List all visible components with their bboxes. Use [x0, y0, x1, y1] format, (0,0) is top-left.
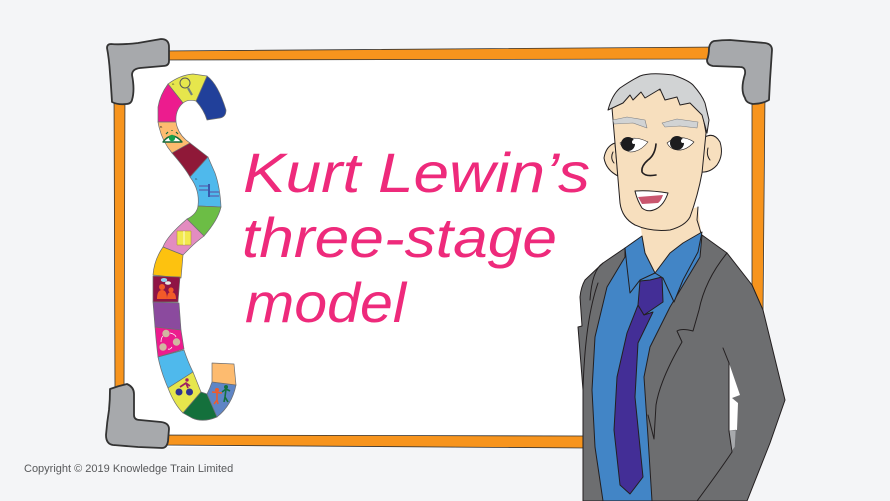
segment: light orange: [212, 363, 236, 385]
right eyebrow: [662, 119, 698, 128]
copyright note: Copyright © 2019 Knowledge Train Limited: [24, 463, 233, 475]
title line 2: three-stage: [242, 206, 557, 269]
segment: gold: [153, 247, 183, 278]
segment: green: [187, 206, 221, 236]
segment: yellow with cyclist: [168, 372, 201, 413]
corner bracket: top right: [707, 40, 772, 104]
corner bracket: bottom left: [106, 384, 169, 448]
sleeve cuff: [729, 430, 736, 452]
segment: slate blue with dancers: [207, 382, 236, 417]
jacket: [578, 235, 785, 501]
left ear: [604, 143, 618, 176]
neck: [640, 207, 701, 273]
mouth: [635, 191, 668, 211]
segment: orange B with eye: [158, 122, 190, 153]
jacket details: [583, 253, 732, 501]
left collar: [625, 236, 655, 293]
segment: dark maroon with people: [153, 276, 180, 302]
winding change path board game: [153, 74, 236, 420]
nose: [642, 144, 656, 176]
title line 3: model: [245, 271, 408, 334]
segment: navy: [196, 76, 226, 120]
right collar: [655, 232, 702, 302]
tie body: [614, 305, 653, 494]
tie knot: [638, 277, 663, 315]
segment: light blue C with sliders: C.: [195, 177, 198, 181]
shirt: [592, 235, 702, 501]
arm gap: [729, 363, 740, 431]
segment: yellow A with magnifier: A.: [172, 82, 175, 86]
segment: magenta with cycle: [155, 327, 184, 357]
neck right edge: [697, 207, 701, 233]
title: [242, 141, 590, 334]
segment: light blue: [158, 350, 193, 388]
segment: light blue C with sliders: [190, 157, 221, 207]
segment: dark green: [183, 392, 217, 420]
segment: yellow A with magnifier: [168, 74, 207, 103]
corner bracket: top left: [107, 39, 169, 104]
segment: pink with book: [163, 219, 204, 255]
left eyebrow: [613, 117, 647, 128]
right ear: [700, 135, 721, 172]
hair: [608, 74, 709, 133]
segment: purple: [153, 302, 181, 330]
tongue: [638, 195, 663, 204]
whiteboard with orange frame: [114, 47, 765, 448]
segment: magenta: [158, 84, 183, 122]
segment: orange B with eye: B.: [160, 125, 163, 129]
right eye: [667, 136, 694, 150]
title line 1: Kurt Lewin’s: [243, 141, 590, 204]
face: [612, 85, 706, 230]
segment: maroon: [172, 143, 208, 177]
presenter character: [578, 74, 785, 501]
ear marks: [612, 148, 710, 163]
left eye: [620, 137, 648, 152]
